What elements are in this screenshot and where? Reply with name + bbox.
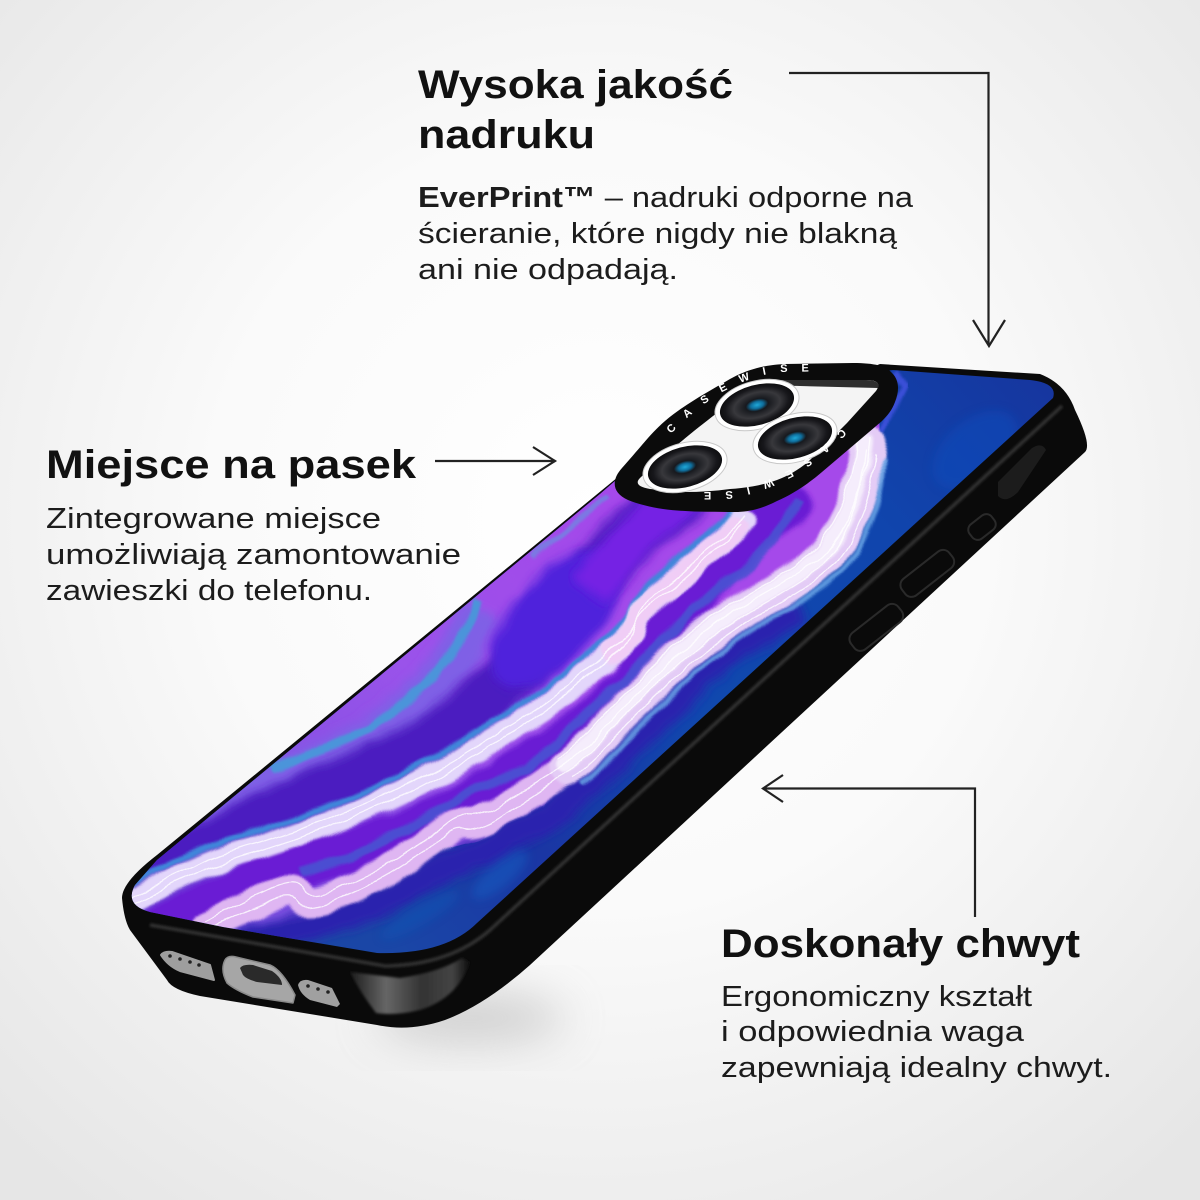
camera island: [614, 363, 898, 512]
middle purple band: [165, 505, 790, 925]
window top shading: [738, 380, 878, 398]
phone case: [122, 364, 1087, 1028]
body text: ani nie odpadają.: [418, 254, 678, 286]
body text: ścieranie, które nigdy nie blakną: [418, 218, 898, 250]
arrow: [435, 447, 555, 475]
upper white band pink section: [613, 528, 736, 653]
teal glitter: [270, 600, 478, 768]
deep indigo under pink band: [230, 610, 800, 945]
arrow: [763, 775, 975, 917]
callout: grip: [721, 775, 1112, 1084]
wide upper ribbon: [566, 445, 868, 768]
marble artwork panel: [132, 370, 1054, 954]
bright violet upper band: [590, 490, 690, 590]
lens top: [709, 371, 805, 439]
upper-left purple field: [142, 423, 880, 931]
dark violet band: [140, 500, 680, 880]
lens right: [747, 404, 843, 472]
bright blue line by camera: [880, 372, 905, 432]
camera window: [638, 380, 878, 492]
upper white band: [125, 520, 742, 905]
side switch: [998, 445, 1046, 499]
charging port: [223, 956, 295, 1003]
heading: Doskonały chwyt: [721, 922, 1080, 966]
body text: zawieszki do telefonu.: [46, 575, 372, 607]
white ribbon core: [563, 442, 865, 765]
side volume buttons: [846, 511, 999, 654]
body text: Zintegrowane miejsce: [46, 503, 381, 535]
arrow: [789, 73, 1005, 346]
heading: Miejsce na pasek: [46, 443, 417, 487]
glitter edge to blue field: [582, 460, 884, 783]
blue base: [132, 370, 1054, 954]
lavender lower-left band: [206, 602, 498, 821]
left speaker grille: [161, 952, 214, 980]
white streak lines: [123, 436, 875, 934]
body text: i odpowiednia waga: [721, 1016, 1025, 1048]
drop shadow under phone: [375, 994, 565, 1042]
violet core: [484, 546, 624, 689]
blue glitter above white band: [120, 505, 737, 890]
right speaker grille: [298, 980, 340, 1007]
body text: umożliwiają zamontowanie: [46, 539, 461, 571]
brand ring text bottom: CASEWISE: [704, 430, 846, 500]
body text: EverPrint™ – nadruki odporne na: [418, 182, 878, 214]
body text: zapewniają idealny chwyt.: [721, 1052, 1112, 1084]
brand ring text top: CASEWISE: [667, 364, 808, 432]
bottom corner reflection: [350, 958, 470, 1014]
blue mottling: [405, 413, 1019, 922]
heading: nadruku: [418, 113, 595, 157]
rim highlight: [150, 406, 1062, 966]
callout: strap slot: [46, 443, 555, 607]
heading: Wysoka jakość: [418, 63, 733, 107]
body text: Ergonomiczny kształt: [721, 981, 1032, 1013]
lens left: [637, 433, 733, 501]
blue glitter around pink band: [300, 500, 800, 872]
island frame: [615, 363, 898, 512]
callout: print quality: [418, 63, 1005, 346]
case body: [122, 364, 1087, 1028]
lower pink band: [191, 758, 572, 930]
